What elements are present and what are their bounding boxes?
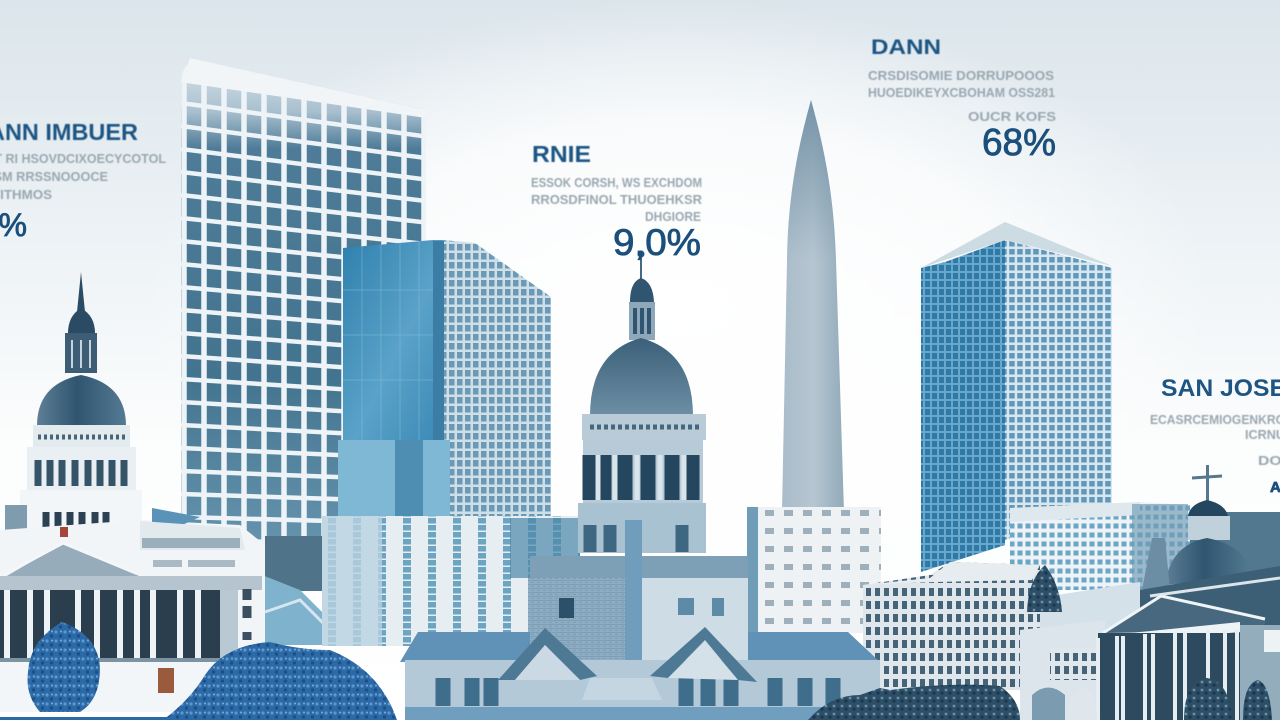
building: white grid tower xyxy=(181,58,426,590)
upper right percentage: 68% xyxy=(982,122,1056,164)
left capitol lantern xyxy=(65,272,97,373)
San Jose heading: SAN JOSE xyxy=(1161,375,1280,402)
San Jose description xyxy=(1150,412,1280,468)
center capitol gables xyxy=(498,627,757,700)
left capitol dome xyxy=(37,375,126,426)
upper right description: HUOEDIKEYXCBOHAM OSS281 xyxy=(868,85,1055,100)
building: blue glass tower xyxy=(338,240,551,520)
callout: center city xyxy=(531,141,703,263)
center capitol side roofs xyxy=(400,632,880,662)
trees: left blue tree xyxy=(28,622,100,712)
building: needle spire xyxy=(782,100,844,512)
right capitol dome xyxy=(1165,538,1252,585)
center capitol drum xyxy=(578,414,706,553)
center description: RROSDFINOL THUOEHKSR xyxy=(531,192,703,207)
left description xyxy=(0,151,166,202)
center capitol stone body xyxy=(528,520,748,680)
center percentage: 9,0% xyxy=(613,222,701,263)
upper right heading: DANN xyxy=(871,36,941,59)
trees: lower left ground hedge xyxy=(0,717,170,720)
center description: DHGIORE xyxy=(645,209,701,224)
center capitol wing xyxy=(405,660,880,720)
center capitol dome xyxy=(590,338,693,416)
trees: large blue tree xyxy=(163,642,397,720)
building: right low glass block xyxy=(1010,502,1280,590)
building: low pale block with blue stripes xyxy=(322,516,580,646)
landmark: center domed capitol xyxy=(400,250,880,720)
center capitol spire and lantern xyxy=(629,250,655,340)
right capitol colonnade xyxy=(1098,625,1280,720)
landmark: right columned capitol xyxy=(1020,465,1280,720)
right capitol tower xyxy=(1188,465,1230,540)
left capitol drum xyxy=(5,425,142,532)
upper right description xyxy=(868,68,1056,124)
upper right description: OUCR KOFS xyxy=(968,109,1056,124)
building: white rounded block xyxy=(863,562,1140,690)
building: right blue tower xyxy=(921,222,1112,572)
callout: upper right city xyxy=(868,36,1056,164)
callout: left city xyxy=(0,119,166,243)
center heading: RNIE xyxy=(532,141,591,167)
upper right description: CRSDISOMIE DORRUPOOOS xyxy=(868,68,1054,83)
building: white block below spire xyxy=(747,507,881,633)
building: dark blocks behind left capitol xyxy=(262,536,358,645)
landmark: left domed capitol xyxy=(0,272,265,712)
center description xyxy=(531,175,703,224)
right capitol roof and pediment xyxy=(1020,566,1280,720)
center description: ESSOK CORSH, WS EXCHDOM xyxy=(531,175,702,190)
left capitol main block xyxy=(0,508,265,712)
trees: dark right shrubs xyxy=(808,678,1272,720)
callout: San Jose xyxy=(1150,375,1280,496)
